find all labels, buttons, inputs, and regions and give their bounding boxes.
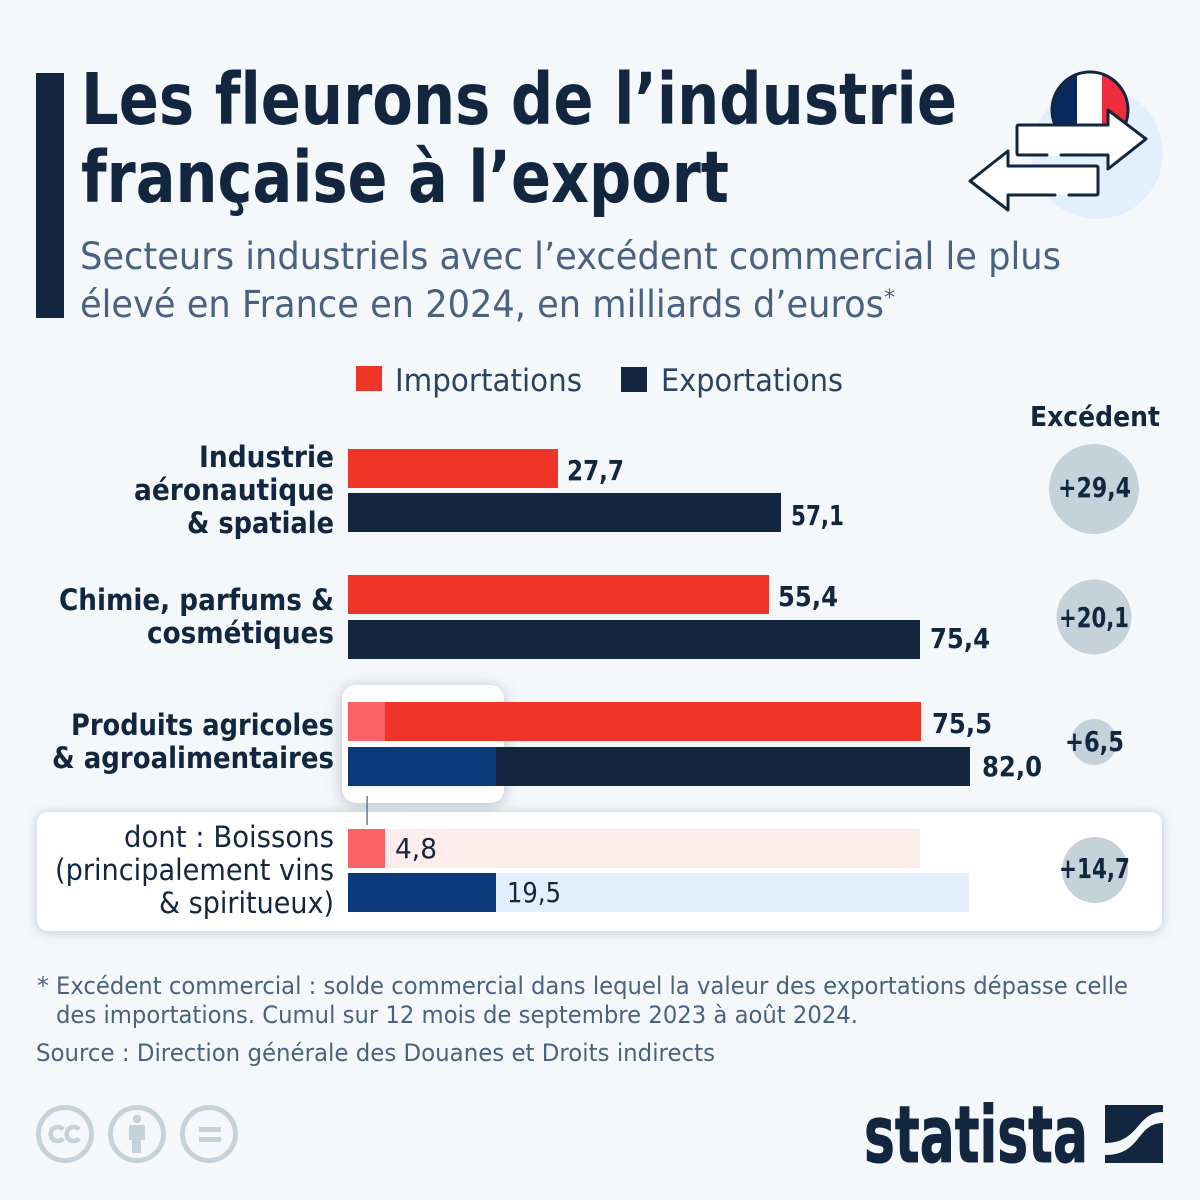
row: chimie, parfums & cosmétiques: Chimie, parfums & [59, 583, 334, 617]
subtitle: Secteurs industriels avec l’excédent commercial le plus [80, 235, 1061, 278]
panel: dont boissons [37, 796, 1162, 931]
footnote: des importations. Cumul sur 12 mois de septembre 2023 à août 2024. [56, 1001, 858, 1029]
boissons surplus: +14,7 [1059, 852, 1130, 885]
legend: Importations [395, 363, 582, 399]
footnote: Excédent commercial : solde commercial dans lequel la valeur des exportations dépasse celle [56, 972, 1128, 1000]
title: Les fleurons de l’industrie [81, 58, 957, 141]
row: aéronautique & spatiale: 57,1 [791, 499, 844, 532]
boissons bars [348, 829, 969, 912]
boissons bars: 4,8 [395, 832, 437, 865]
boissons label: (principalement vins [55, 853, 334, 887]
row: chimie, parfums & cosmétiques: +20,1 [1059, 601, 1129, 634]
legend [356, 363, 843, 399]
row: chimie, parfums & cosmétiques [59, 575, 1132, 659]
boissons surplus [1059, 837, 1130, 903]
row: produits agricoles & agroalimentaires: & agroalimentaires [52, 741, 334, 775]
icon: French flag with trade arrows [970, 70, 1163, 219]
row: chimie, parfums & cosmétiques: 55,4 [778, 580, 838, 613]
row: chimie, parfums & cosmétiques: cosmétiques [147, 616, 334, 650]
subtitle: * [884, 286, 895, 311]
row: aéronautique & spatiale: 27,7 [567, 454, 624, 487]
row: aéronautique & spatiale: Industrie [199, 440, 334, 474]
title: française à l’export [81, 136, 729, 219]
row: aéronautique & spatiale: aéronautique [134, 473, 334, 507]
row: produits agricoles & agroalimentaires: +6,5 [1065, 725, 1124, 758]
boissons label: & spiritueux) [159, 886, 334, 920]
source: Source : Direction générale des Douanes et Droits indirects [36, 1039, 715, 1067]
boissons label [55, 820, 334, 920]
footnote: * [37, 972, 49, 1000]
icon: creative commons licence [38, 1108, 236, 1160]
title [81, 58, 957, 219]
row: aéronautique & spatiale: & spatiale [187, 506, 334, 540]
row: produits agricoles & agroalimentaires: 75,5 [932, 707, 992, 740]
row: produits agricoles & agroalimentaires [52, 702, 1124, 786]
row: produits agricoles & agroalimentaires: 82,0 [982, 750, 1042, 783]
callout highlight card [342, 685, 504, 803]
boissons label: dont : Boissons [124, 820, 334, 854]
subtitle [80, 235, 1061, 326]
boissons bars: 19,5 [507, 876, 561, 909]
row: produits agricoles & agroalimentaires: Produits agricoles [71, 708, 334, 742]
row: aéronautique & spatiale [134, 440, 1139, 540]
logo: statista: statista [864, 1091, 1088, 1181]
row: chimie, parfums & cosmétiques: 75,4 [930, 622, 990, 655]
row: aéronautique & spatiale: +29,4 [1058, 471, 1131, 504]
title accent bar [36, 73, 64, 318]
connector line [366, 796, 368, 825]
subtitle: élevé en France en 2024, en milliards d’euros [80, 283, 884, 326]
legend: Exportations [661, 363, 843, 399]
column heading: Excédent: Excédent [1030, 400, 1160, 433]
footnote [37, 972, 1128, 1029]
